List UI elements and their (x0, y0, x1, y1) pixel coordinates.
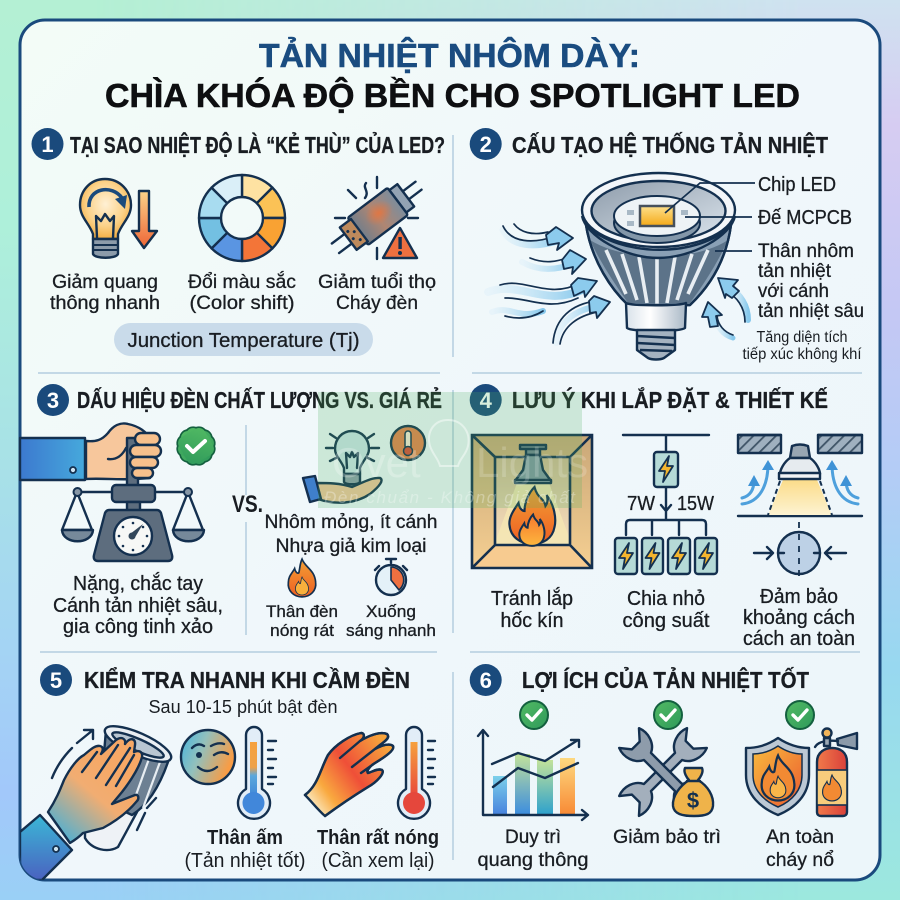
label: aluminium body: tản nhiệt (758, 260, 832, 282)
watermark: Ovet (332, 439, 421, 486)
heading 4: LƯU Ý KHI LẮP ĐẶT & THIẾT KẾ (512, 386, 828, 413)
icon: fire shield (746, 738, 809, 815)
label: split power: công suất (622, 610, 710, 632)
text: cheap signs (264, 511, 438, 557)
panel: section 1 why heat is the enemy (32, 128, 445, 356)
icon: wrenches and money bag (618, 727, 713, 817)
heading 6: 6 (480, 668, 492, 693)
icon: burnt LED driver with warning (325, 172, 429, 262)
pill: junction temperature (114, 323, 373, 356)
icon: power split diagram: 15W (677, 493, 714, 515)
label: color shift (188, 270, 296, 314)
heading 1 (32, 128, 445, 160)
label: avoid enclosed recess: Tránh lắp (491, 587, 573, 610)
icon: hot hand (305, 733, 393, 816)
label: maintain flux (478, 826, 588, 871)
heading 5: 5 (50, 668, 62, 693)
label: aluminium body (758, 240, 864, 322)
label: luminous decline (50, 271, 160, 314)
icon: dimming bulb (80, 179, 157, 258)
icon: hot thermometer (398, 727, 435, 819)
icon: ventilated downlight clearance (738, 435, 862, 578)
icon: color wheel (199, 175, 285, 261)
text: cheap signs: Nhựa giả kim loại (276, 535, 426, 557)
label: hot body: Thân đèn (266, 603, 338, 621)
label: very hot body (317, 827, 439, 872)
label: fast dimming: Xuống (366, 603, 416, 621)
label: fast dimming: sáng nhanh (346, 622, 436, 640)
subtitle: Sau 10-15 phút bật đèn (148, 697, 338, 717)
title: CHÌA KHÓA ĐỘ BỀN CHO SPOTLIGHT LED (105, 76, 800, 114)
heading 2 (470, 128, 829, 160)
heading 4: 4 (480, 388, 493, 413)
label: color shift: Đổi màu sắc (188, 270, 296, 293)
text: quality signs (53, 572, 223, 638)
icon: hand with light bulb (303, 431, 382, 503)
text: quality signs: Nặng, chắc tay (73, 572, 204, 595)
label: luminous decline: thông nhanh (50, 292, 160, 314)
panel: section 5 quick hand check (20, 664, 439, 880)
label: luminous decline: Giảm quang (52, 271, 158, 293)
label: lifespan (318, 271, 436, 314)
label: split power (622, 588, 710, 632)
note: air contact area (742, 329, 862, 363)
heading 5 (40, 664, 410, 696)
heading 2: CẤU TẠO HỆ THỐNG TẢN NHIỆT (512, 130, 829, 158)
note: air contact area: Tăng diện tích (756, 329, 848, 346)
label: aluminium body: tản nhiệt sâu (758, 300, 864, 322)
text: quality signs: Cánh tản nhiệt sâu, (53, 594, 223, 617)
label: fast dimming (346, 603, 436, 640)
icon: wink face (181, 730, 235, 784)
label: maintain flux: quang thông (478, 849, 588, 871)
heading 2: 2 (480, 132, 492, 157)
icon: power split diagram (615, 435, 717, 574)
label: warm body (184, 827, 306, 872)
panel: section 6 benefits (470, 664, 857, 871)
label: MCPCB: Đế MCPCB (758, 207, 852, 229)
label: aluminium body: Thân nhôm (758, 240, 854, 262)
pill: junction temperature: Junction Temperature (Tj) (128, 330, 360, 352)
panel: section 4 installation notes (470, 384, 862, 650)
heading 1: TẠI SAO NHIỆT ĐỘ LÀ “KẺ THÙ” CỦA LED? (70, 130, 445, 158)
watermark: Đèn chuẩn - Không giả chất (324, 488, 576, 507)
icon: stopwatch (375, 559, 407, 595)
heading 3 (37, 384, 442, 416)
heading 4 (470, 384, 828, 416)
label: versus: VS. (232, 491, 263, 518)
icon: enclosed recess with fire (472, 435, 592, 568)
label: safe distance (743, 586, 855, 650)
heading 3: 3 (47, 388, 59, 413)
icon: power split diagram: 7W (627, 493, 655, 515)
label: safe distance: cách an toàn (743, 628, 855, 650)
label: fire safety: An toàn (766, 826, 834, 848)
label: very hot body: (Cần xem lại) (322, 850, 434, 872)
label: fire safety: cháy nổ (766, 849, 834, 871)
icon: hand gripping lamp (20, 719, 175, 880)
heading 1: 1 (41, 132, 54, 157)
note: air contact area: tiếp xúc không khí (742, 346, 862, 363)
watermark: Lights (476, 439, 588, 486)
icon: fire extinguisher (815, 728, 857, 816)
text: quality signs: gia công tinh xảo (63, 615, 213, 638)
label: Chip LED: Chip LED (758, 174, 836, 196)
panel: section 2 heatsink structure (470, 128, 864, 363)
label: hot body: nóng rát (270, 622, 334, 640)
icon: wrenches and money bag: $ (687, 788, 699, 813)
label: lifespan: Giảm tuổi thọ (318, 271, 436, 293)
label: warm body: Thân ấm (207, 827, 283, 849)
label: safe distance: Đảm bảo (760, 586, 838, 608)
icon: hand holding heavy scale (20, 423, 204, 561)
label: color shift: (Color shift) (190, 292, 294, 314)
watermark (318, 392, 588, 508)
label: avoid enclosed recess: hốc kín (500, 610, 564, 632)
heading 5: KIỂM TRA NHANH KHI CẦM ĐÈN (84, 666, 410, 693)
badge: green check (176, 426, 216, 466)
label: warm body: (Tản nhiệt tốt) (184, 850, 306, 872)
heading 6: LỢI ÍCH CỦA TẢN NHIỆT TỐT (522, 665, 810, 693)
label: fire safety (766, 826, 834, 871)
panel: section 3 quality vs cheap (20, 384, 442, 640)
heading 3: DẤU HIỆU ĐÈN CHẤT LƯỢNG VS. GIÁ RẺ (77, 385, 442, 413)
chart: sustained luminous flux (478, 730, 588, 820)
icon: flame (288, 559, 316, 597)
badge: thermometer (391, 426, 425, 460)
label: hot body (266, 603, 338, 640)
heading 6 (470, 664, 810, 696)
text: cheap signs: Nhôm mỏng, ít cánh (264, 511, 438, 533)
label: lower maintenance: Giảm bảo trì (613, 826, 721, 848)
label: very hot body: Thân rất nóng (317, 827, 439, 849)
icon: LED spotlight cutaway (582, 173, 735, 360)
label: lifespan: Cháy đèn (336, 292, 418, 314)
title (105, 36, 800, 114)
icon: warm thermometer (238, 727, 276, 819)
label: aluminium body: với cánh (758, 280, 829, 302)
label: maintain flux: Duy trì (505, 826, 561, 848)
callout lines (665, 183, 755, 251)
title: TẢN NHIỆT NHÔM DÀY: (259, 36, 640, 74)
check badges (520, 701, 814, 729)
airflow arrows (488, 224, 748, 344)
label: split power: Chia nhỏ (627, 588, 705, 610)
label: safe distance: khoảng cách (743, 607, 855, 629)
label: avoid enclosed recess (491, 587, 573, 632)
